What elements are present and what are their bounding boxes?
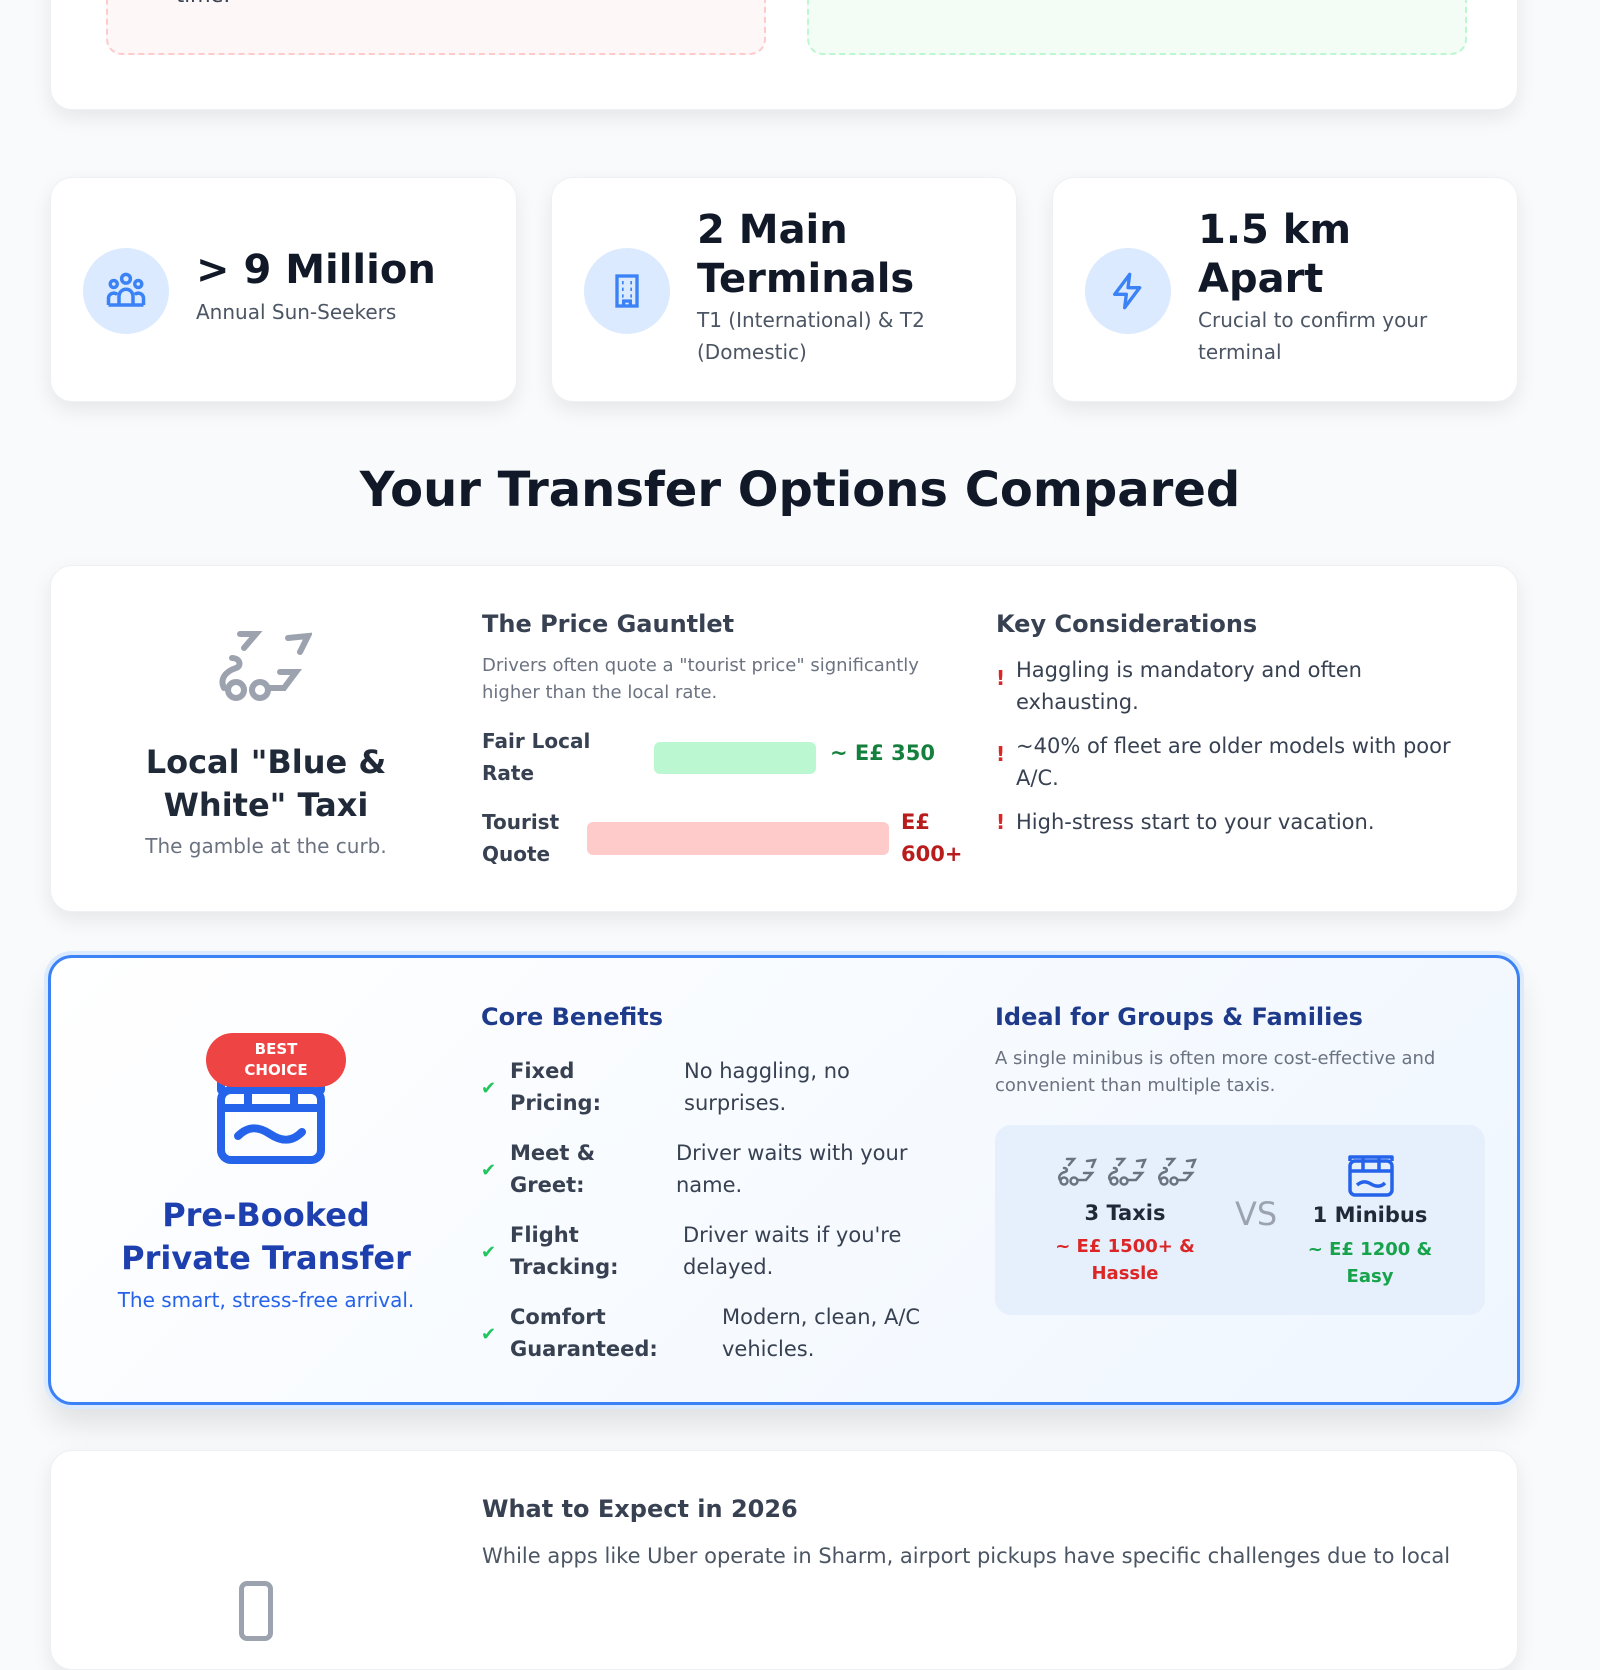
stat: visitors: Annual Sun-Seekers (196, 300, 396, 324)
bar: fair local rate (482, 729, 935, 785)
core benefits: Greet: (510, 1173, 585, 1197)
price gauntlet: Drivers often quote a "tourist price" significantly (482, 655, 919, 676)
panel: local taxi: The gamble at the curb. (145, 834, 387, 858)
core benefits: Pricing: (510, 1091, 601, 1115)
title: private transfer: Private Transfer (121, 1239, 411, 1277)
key considerations: ! (996, 742, 1005, 766)
icon: bolt (1085, 248, 1171, 334)
core benefits: delayed. (683, 1255, 773, 1279)
core benefits: Flight (510, 1223, 579, 1247)
core benefits (481, 1003, 920, 1361)
core benefits: vehicles. (722, 1337, 814, 1361)
callout: red dashed box (106, 0, 766, 55)
icon: phone (239, 1581, 273, 1641)
badge: best choice (206, 1033, 346, 1087)
stat: terminals (551, 177, 1017, 402)
bar: tourist quote (482, 810, 962, 866)
core benefits: surprises. (684, 1091, 786, 1115)
stat: terminals: T1 (International) & T2 (697, 308, 925, 332)
icon: building (584, 248, 670, 334)
text block: While apps like Uber operate in Sharm, airport pickups have specific challenges due to local (482, 1544, 1450, 1568)
core benefits: ✔ (481, 1078, 496, 1099)
comparison box: Hassle (1091, 1263, 1159, 1284)
groups comparison: convenient than multiple taxis. (995, 1075, 1275, 1096)
core benefits: Core Benefits (481, 1003, 663, 1031)
heading: what to expect: What to Expect in 2026 (482, 1495, 798, 1523)
bar: fair local rate: ~ E£ 350 (830, 741, 935, 765)
core benefits: Tracking: (510, 1255, 619, 1279)
core benefits: Driver waits if you're (683, 1223, 901, 1247)
comparison box: ~ E£ 1200 & (1308, 1239, 1432, 1260)
key considerations: High-stress start to your vacation. (1016, 810, 1375, 834)
bar: tourist quote: Quote (482, 842, 550, 866)
comparison box: Easy (1347, 1266, 1393, 1287)
price gauntlet: higher than the local rate. (482, 682, 717, 703)
core benefits: Fixed (510, 1059, 574, 1083)
icon: three taxis (1058, 1158, 1197, 1186)
key considerations: ~40% of fleet are older models with poor (1016, 734, 1451, 758)
bar: fair local rate: Rate (482, 761, 534, 785)
price gauntlet (482, 610, 962, 866)
price gauntlet: The Price Gauntlet (482, 610, 734, 638)
core benefits: Meet & (510, 1141, 595, 1165)
badge: best choice: CHOICE (244, 1061, 308, 1079)
bar: tourist quote: Tourist (482, 810, 559, 834)
icon: people (83, 248, 169, 334)
icon: minibus (1348, 1155, 1394, 1197)
title: local taxi: White" Taxi (164, 786, 368, 824)
panel: ride apps (50, 1450, 1518, 1670)
core benefits: No haggling, no (684, 1059, 850, 1083)
bar: tourist quote: E£ (901, 810, 930, 834)
core benefits: Modern, clean, A/C (722, 1305, 920, 1329)
key considerations: ! (996, 810, 1005, 834)
top card: previous section (50, 0, 1518, 110)
title: local taxi: Local "Blue & (146, 743, 386, 781)
comparison box: 1 Minibus (1313, 1203, 1427, 1227)
core benefits: Comfort (510, 1305, 606, 1329)
comparison box: 3 Taxis (1085, 1201, 1165, 1225)
core benefits: name. (676, 1173, 742, 1197)
title: local taxi (146, 743, 386, 824)
key considerations: Haggling is mandatory and often (1016, 658, 1362, 682)
heading: Your Transfer Options Compared (360, 462, 1240, 518)
bar: fair local rate: Fair Local (482, 729, 590, 753)
groups comparison: A single minibus is often more cost-effective and (995, 1048, 1435, 1069)
icon: taxi (220, 631, 312, 701)
stat: terminals: Terminals (697, 256, 914, 302)
stat: terminals: (Domestic) (697, 340, 807, 364)
panel: private transfer (48, 955, 1520, 1405)
stat: distance (1052, 177, 1518, 402)
stat: distance: Crucial to confirm your (1198, 308, 1427, 332)
key considerations: A/C. (1016, 766, 1059, 790)
panel: private transfer: The smart, stress-free arrival. (118, 1288, 414, 1312)
stat: distance: Apart (1198, 256, 1323, 302)
key considerations (996, 610, 1451, 834)
badge: best choice: BEST (255, 1040, 297, 1058)
key considerations: Key Considerations (996, 610, 1257, 638)
comparison box: ~ E£ 1500+ & (1055, 1236, 1195, 1257)
stat: visitors (50, 177, 517, 402)
callout: green dashed box (807, 0, 1467, 55)
core benefits: ✔ (481, 1160, 496, 1181)
vs: VS (1235, 1195, 1277, 1233)
groups comparison (995, 1003, 1485, 1315)
title: private transfer (121, 1196, 411, 1277)
core benefits: ✔ (481, 1324, 496, 1345)
stat: visitors: > 9 Million (196, 247, 436, 293)
core benefits: Guaranteed: (510, 1337, 658, 1361)
comparison box (995, 1125, 1485, 1315)
bar: tourist quote: 600+ (901, 842, 962, 866)
stat: distance: terminal (1198, 340, 1282, 364)
key considerations: ! (996, 666, 1005, 690)
icon: minibus with badge (206, 1033, 346, 1164)
stat: distance: 1.5 km (1198, 207, 1351, 253)
panel: local taxi (50, 565, 1518, 912)
key considerations: exhausting. (1016, 690, 1139, 714)
groups comparison: Ideal for Groups & Families (995, 1003, 1363, 1031)
title: private transfer: Pre-Booked (162, 1196, 370, 1234)
stat: terminals: 2 Main (697, 207, 848, 253)
core benefits: ✔ (481, 1242, 496, 1263)
core benefits: Driver waits with your (676, 1141, 907, 1165)
